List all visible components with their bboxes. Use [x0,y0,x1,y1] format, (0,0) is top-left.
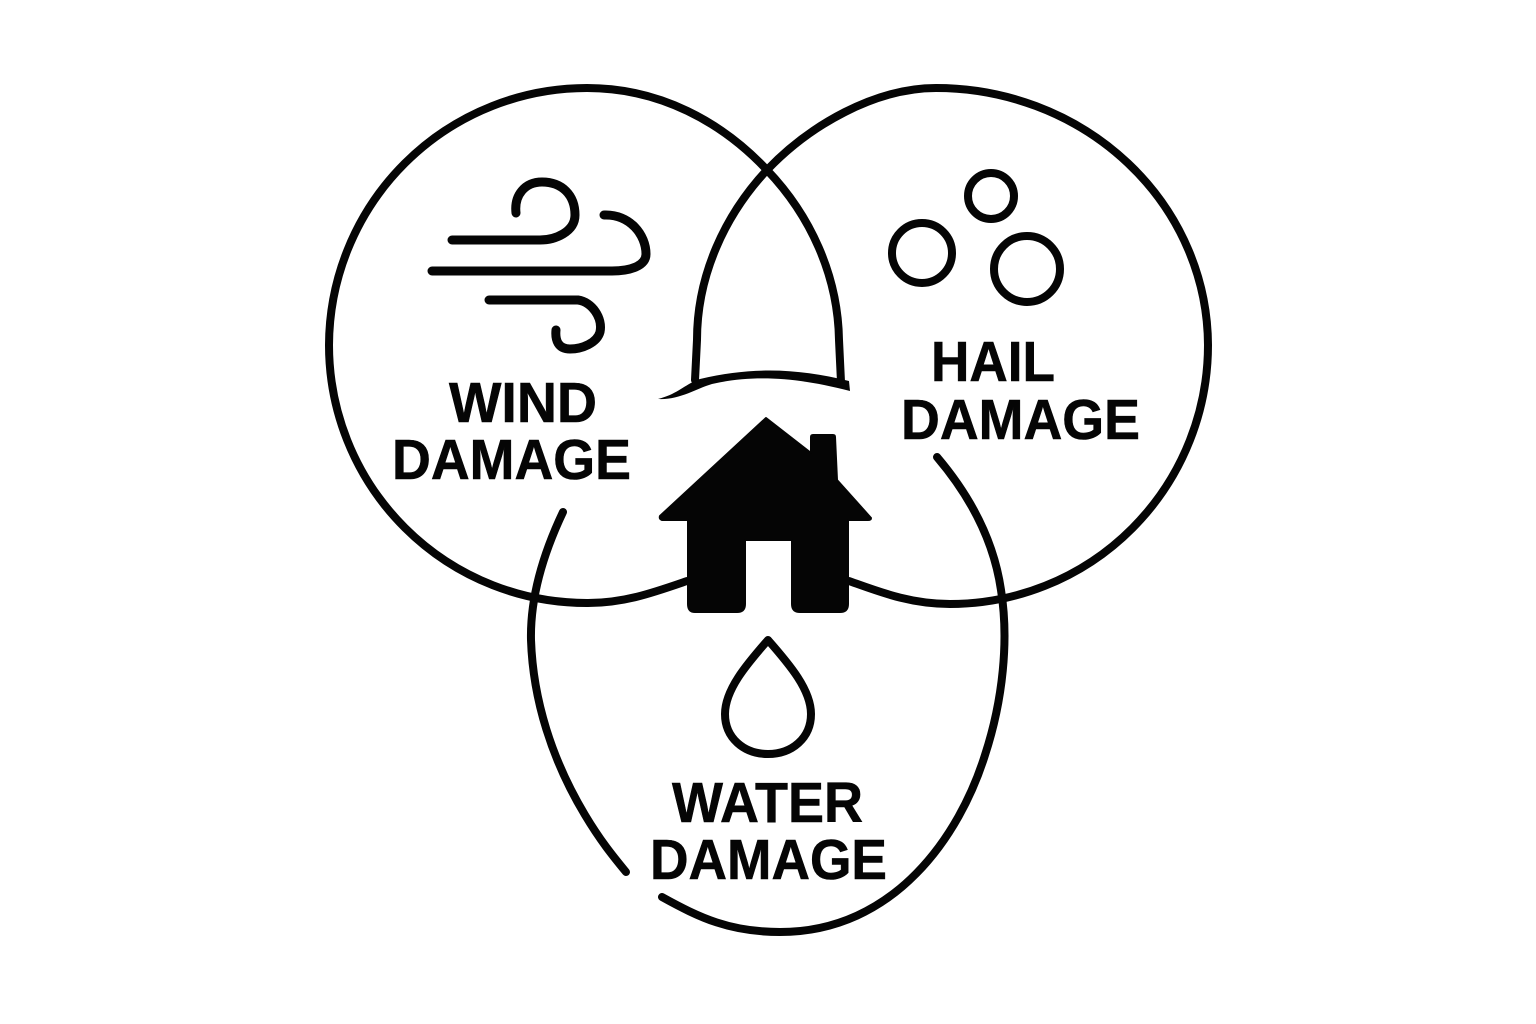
label: hail damage [901,330,1140,452]
label: hail damage: HAIL [931,330,1055,394]
circle: hail damage [695,88,1208,604]
label: wind damage: WIND [449,371,597,435]
label: water damage: DAMAGE [650,828,887,892]
label: water damage: WATER [672,771,863,835]
label: hail damage: DAMAGE [901,388,1140,452]
icon: house [660,418,871,612]
circle: wind damage [329,88,841,603]
label: wind damage [392,371,631,492]
icon: hail stones [892,173,1060,302]
roof arc of water circle [658,371,850,399]
label: water damage [650,771,887,892]
icon: water drop [725,640,811,754]
circle: water damage [531,457,1004,932]
label: wind damage: DAMAGE [392,428,631,492]
icon: wind [432,182,646,349]
